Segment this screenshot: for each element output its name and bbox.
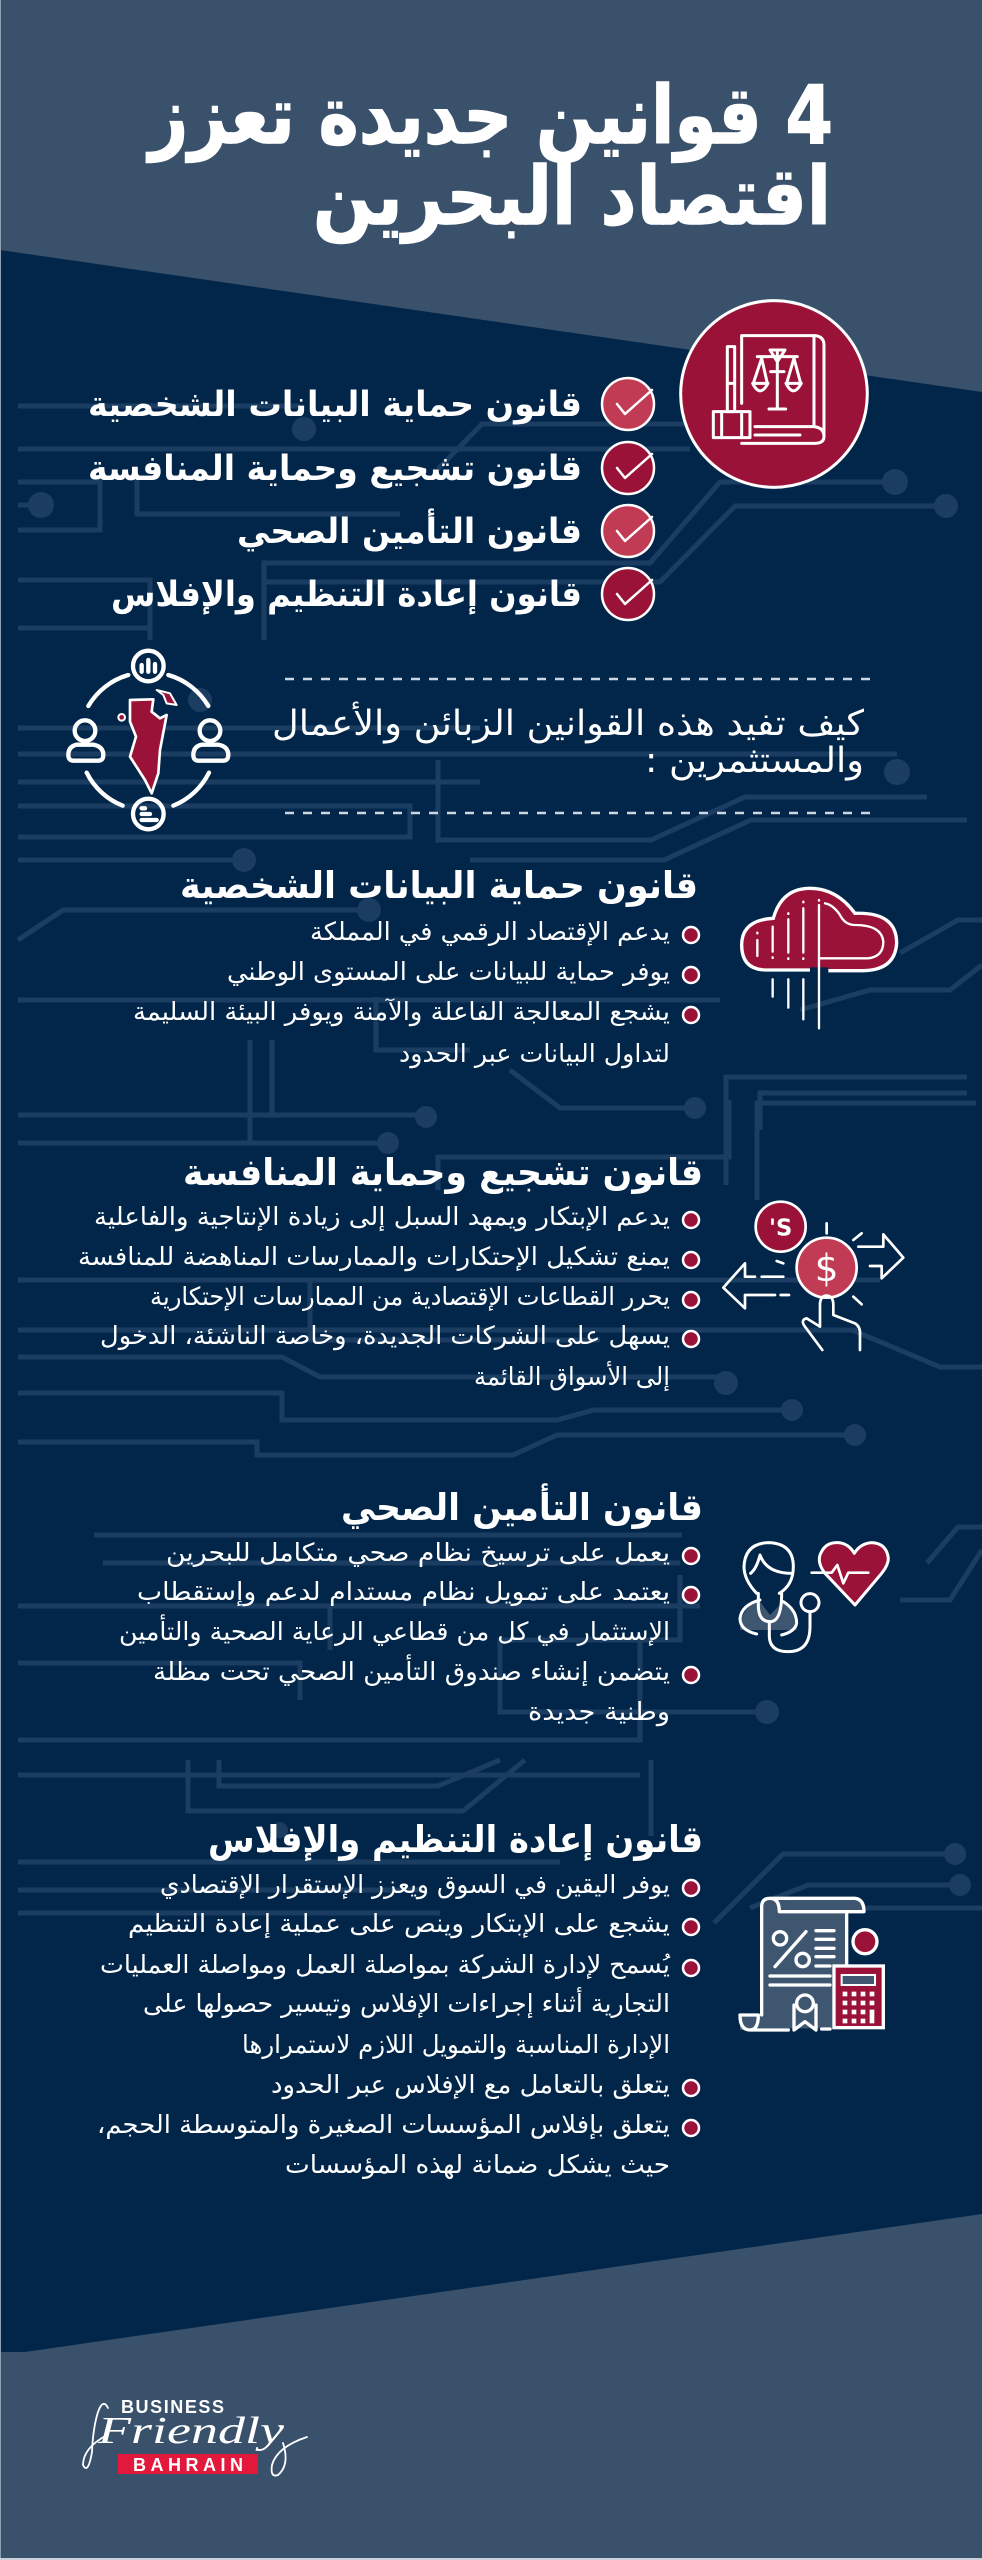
check item 2: قانون تشجيع وحماية المنافسة [88, 449, 582, 489]
bullet text: إلى الأسواق القائمة [474, 1360, 670, 1392]
bullet text: يوفر اليقين في السوق ويعزز الإستقرار الإقتصادي [160, 1870, 670, 1900]
icon: currency exchange [723, 1202, 903, 1350]
title: اقتصاد البحرين [313, 150, 831, 244]
bullet text: الإستثمار في كل من قطاعي الرعاية الصحية والتأمين [119, 1613, 670, 1647]
heading: قانون تشجيع وحماية المنافسة [183, 1151, 703, 1194]
laws checklist [88, 378, 654, 620]
bullet text: يتضمن إنشاء صندوق التأمين الصحي تحت مظلة [153, 1653, 670, 1687]
bullet text: يشجع على الإبتكار وينص على عملية إعادة التنظيم [128, 1909, 670, 1939]
background: circuit pattern [18, 406, 982, 1923]
bullet text: يسهل على الشركات الجديدة، وخاصة الناشئة، الدخول [100, 1321, 670, 1351]
section: health insurance law [119, 1483, 888, 1727]
title [146, 69, 833, 244]
section: reorganisation and bankruptcy law [97, 1818, 883, 2180]
check item 4: قانون إعادة التنظيم والإفلاس [111, 575, 582, 615]
bullet text: يدعم الإبتكار ويمهد السبل إلى زيادة الإنتاجية والفاعلية [94, 1202, 670, 1232]
icon: percent document and calculator [740, 1898, 883, 2030]
bullet text [97, 1870, 670, 2180]
check item 3: قانون التأمين الصحي [237, 508, 582, 552]
logo badge: BAHRAIN: BAHRAIN [133, 2455, 243, 2475]
how do these laws benefit heading: والمستثمرين : [645, 741, 864, 781]
bullet text: يُسمح لإدارة الشركة بمواصلة العمل ومواصلة العمليات [100, 1950, 670, 1980]
icon: law book in circle [681, 301, 867, 487]
bullet text: الإدارة المناسبة والتمويل اللازم لاستمرارها [242, 2030, 670, 2060]
check item 1: قانون حماية البيانات الشخصية [88, 385, 582, 425]
bottom footer band [0, 2214, 982, 2560]
bullet text: يشجع المعالجة الفاعلة والآمنة ويوفر البيئة السليمة [133, 997, 670, 1027]
icon: Bahrain map with people ring [68, 651, 228, 829]
title: 4 قوانين جديدة تعزز [146, 69, 833, 163]
icon: currency exchange: $ [815, 1246, 839, 1290]
bullet text: لتداول البيانات عبر الحدود [399, 1039, 670, 1069]
bullet text: يحرر القطاعات الإقتصادية من الممارسات الإحتكارية [150, 1282, 670, 1311]
bullet text [133, 917, 670, 1069]
logo word: BUSINESS: BUSINESS [121, 2397, 224, 2417]
bullet text: التجارية أثناء إجراءات الإفلاس وتيسير حصولها على [143, 1986, 670, 2019]
how do these laws benefit heading [272, 701, 864, 781]
check item 3 [237, 505, 654, 557]
bullet text: وطنية جديدة [528, 1697, 670, 1727]
section: competition promotion and protection law [78, 1151, 903, 1392]
bullet text [78, 1202, 670, 1392]
bullets [683, 1548, 699, 1683]
bullets [683, 1880, 699, 2136]
heading: قانون التأمين الصحي [341, 1483, 703, 1529]
logo word: Friendly: Friendly [97, 2410, 284, 2452]
icon: currency exchange: 'S [769, 1215, 792, 1241]
how do these laws benefit heading: كيف تفيد هذه القوانين الزبائن والأعمال [272, 701, 864, 744]
icon: data cloud [742, 888, 897, 1028]
bullet text: يمنع تشكيل الإحتكارات والممارسات المناهضة للمنافسة [78, 1242, 670, 1272]
icon: doctor and heart [740, 1543, 888, 1652]
bullets [683, 927, 699, 1023]
top header band [0, 0, 982, 392]
bullet text: يوفر حماية للبيانات على المستوى الوطني [227, 957, 670, 986]
bullet text: يدعم الإقتصاد الرقمي في المملكة [310, 917, 670, 947]
bullet text: يتعلق بالتعامل مع الإفلاس عبر الحدود [271, 2070, 670, 2100]
bullet text: يعتمد على تمويل نظام مستدام لدعم وإستقطاب [137, 1577, 670, 1607]
heading: قانون إعادة التنظيم والإفلاس [208, 1818, 703, 1861]
bullet text: حيث يشكل ضمانة لهذه المؤسسات [285, 2150, 670, 2180]
bullet text [119, 1538, 670, 1727]
bullets [683, 1212, 699, 1347]
section: personal data protection law [133, 864, 897, 1069]
bullet text: يتعلق بإفلاس المؤسسات الصغيرة والمتوسطة الحجم، [97, 2110, 670, 2140]
logo: Business Friendly Bahrain [83, 2397, 307, 2476]
heading: قانون حماية البيانات الشخصية [180, 864, 698, 907]
bullet text: يعمل على ترسيخ نظام صحي متكامل للبحرين [166, 1538, 670, 1568]
